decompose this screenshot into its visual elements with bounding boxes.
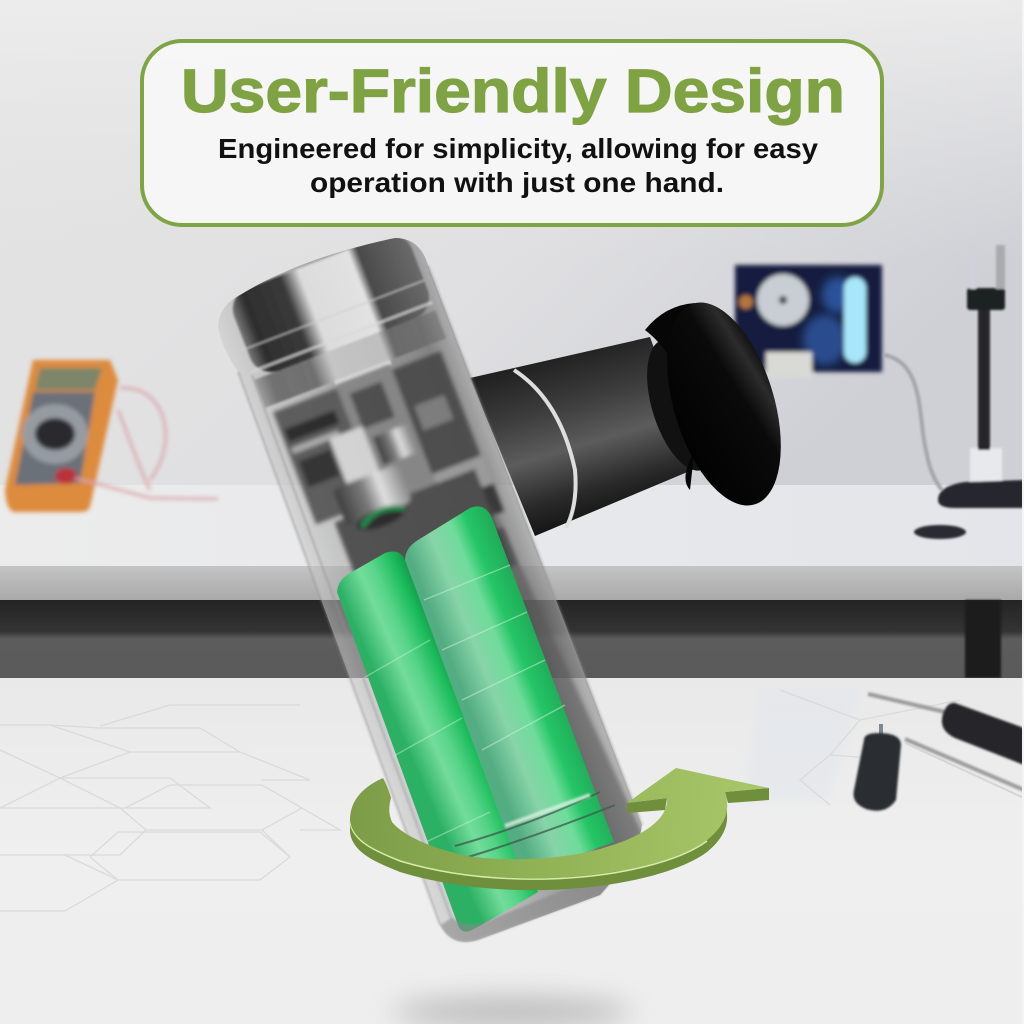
metal cap (232, 238, 518, 572)
rotation arrow (350, 768, 769, 890)
subheading (218, 133, 819, 198)
shadow under device (392, 998, 632, 1024)
silver ring (514, 370, 576, 528)
foreground table (0, 678, 1024, 1024)
heading: User-Friendly Design (181, 57, 845, 125)
right side gray channel (496, 516, 642, 850)
multimeter (5, 360, 218, 512)
arrow top face (350, 768, 769, 878)
glass edge highlights (238, 265, 642, 925)
background: back desk (0, 485, 1024, 678)
subheading: Engineered for simplicity, allowing for easy (218, 133, 819, 164)
head barrel (470, 337, 697, 536)
cable and lab stand (884, 245, 1024, 539)
arrow side depth (350, 803, 727, 890)
neck (633, 331, 731, 479)
rubber attachment (645, 303, 720, 490)
screwdrivers (854, 694, 1024, 811)
transparent massager body (218, 228, 650, 942)
internal electronics (271, 350, 518, 572)
battery band (455, 792, 615, 858)
massager head and black attachment (470, 289, 803, 536)
background: wall (0, 0, 1024, 490)
circuit board on wall (735, 265, 882, 378)
subheading: operation with just one hand. (310, 167, 724, 198)
left battery (337, 552, 538, 932)
title panel (142, 41, 882, 225)
right battery (405, 506, 615, 875)
rubber attachment rim (645, 289, 803, 519)
right image edge (1022, 0, 1024, 1024)
